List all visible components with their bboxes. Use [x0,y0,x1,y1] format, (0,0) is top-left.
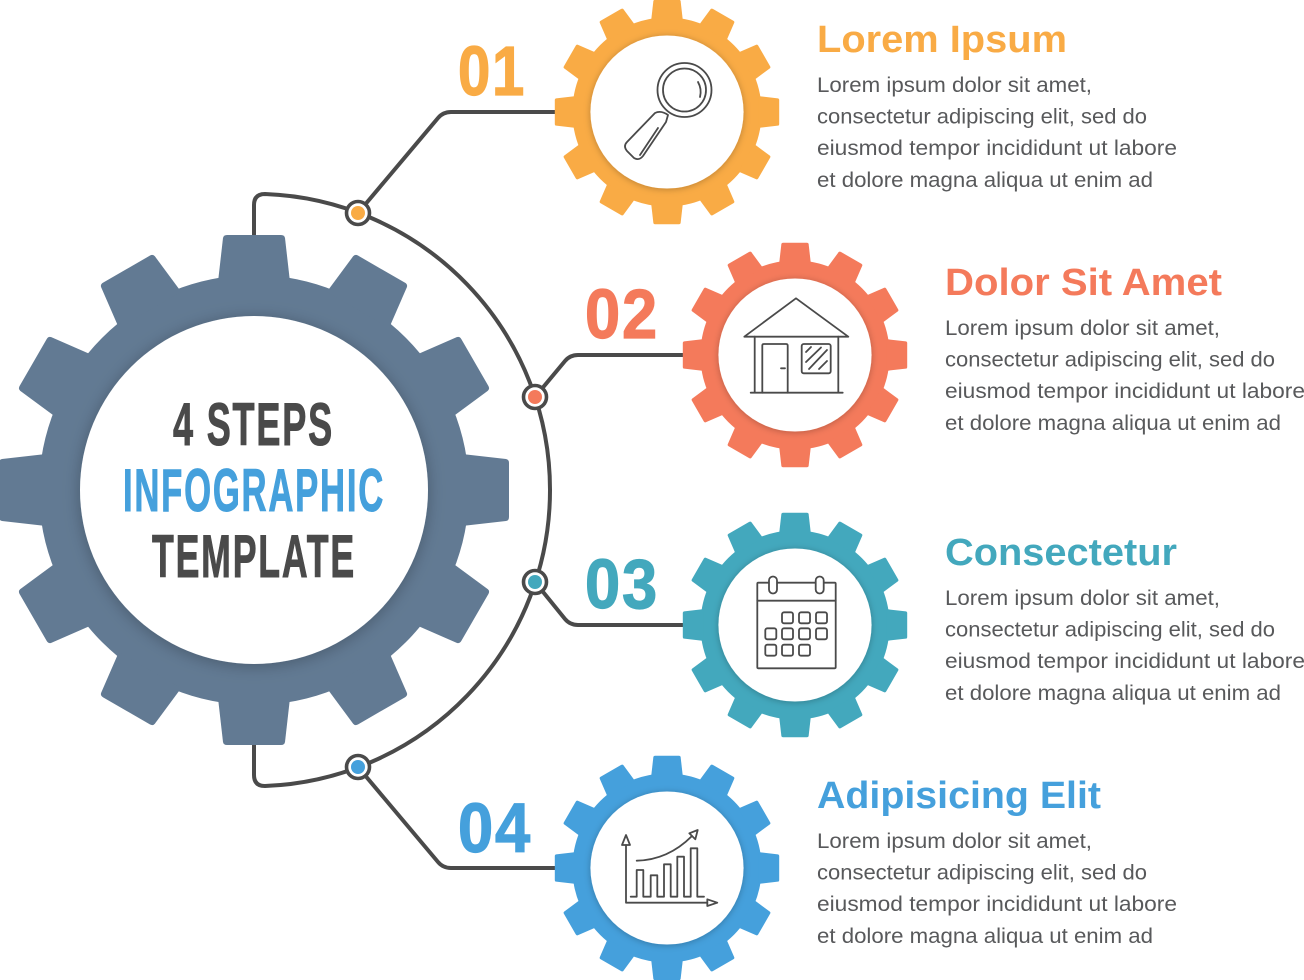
gear 3 [683,513,907,737]
icon: house [744,298,848,393]
number 03: 03 [585,545,659,623]
node 2 [524,386,546,408]
number 01: 01 [458,32,526,110]
body text: eiusmod tempor incididunt ut labore [817,893,1177,916]
central title: TEMPLATE [152,523,356,590]
heading: Dolor Sit Amet [945,262,1222,304]
panel: step 3 [585,513,1304,737]
node 3 [524,570,546,594]
body text: eiusmod tempor incididunt ut labore [945,650,1304,673]
body text: consectetur adipiscing elit, sed do [817,106,1147,128]
gear 2 [683,243,907,467]
number 04: 04 [458,789,532,867]
icon: growth chart [622,830,717,906]
connector lines [254,112,684,868]
body text: eiusmod tempor incididunt ut labore [945,380,1304,403]
icon: calendar [757,576,836,668]
body text: Lorem ipsum dolor sit amet, [817,830,1092,853]
icon: magnifying glass [625,63,712,159]
body text [817,74,1177,192]
panel: step 1 [458,0,1177,224]
body text: et dolore magna aliqua ut enim ad [817,925,1153,948]
body text: consectetur adipiscing elit, sed do [945,348,1275,372]
body text: Lorem ipsum dolor sit amet, [945,587,1220,610]
body text [945,587,1304,705]
central title: INFOGRAPHIC [123,457,385,524]
heading: Lorem Ipsum [817,19,1067,61]
gear 4 [555,756,779,980]
gear 1 [555,0,779,224]
gear shape [0,235,509,745]
node 1 [346,202,370,224]
body text: Lorem ipsum dolor sit amet, [945,317,1220,340]
body text [945,317,1304,435]
body text: eiusmod tempor incididunt ut labore [817,137,1177,160]
heading: Adipisicing Elit [817,775,1101,817]
body text: Lorem ipsum dolor sit amet, [817,74,1092,97]
body text: et dolore magna aliqua ut enim ad [945,682,1281,705]
panel: step 4 [458,756,1177,980]
node 4 [346,756,370,778]
body text: et dolore magna aliqua ut enim ad [945,412,1281,435]
body text [817,830,1177,948]
panel: step 2 [585,243,1304,467]
central gear [0,235,509,745]
central title [123,391,385,590]
body text: consectetur adipiscing elit, sed do [945,618,1275,642]
body text: et dolore magna aliqua ut enim ad [817,169,1153,192]
number 02: 02 [585,275,659,353]
body text: consectetur adipiscing elit, sed do [817,862,1147,884]
heading: Consectetur [945,532,1177,574]
central title: 4 STEPS [173,391,334,458]
